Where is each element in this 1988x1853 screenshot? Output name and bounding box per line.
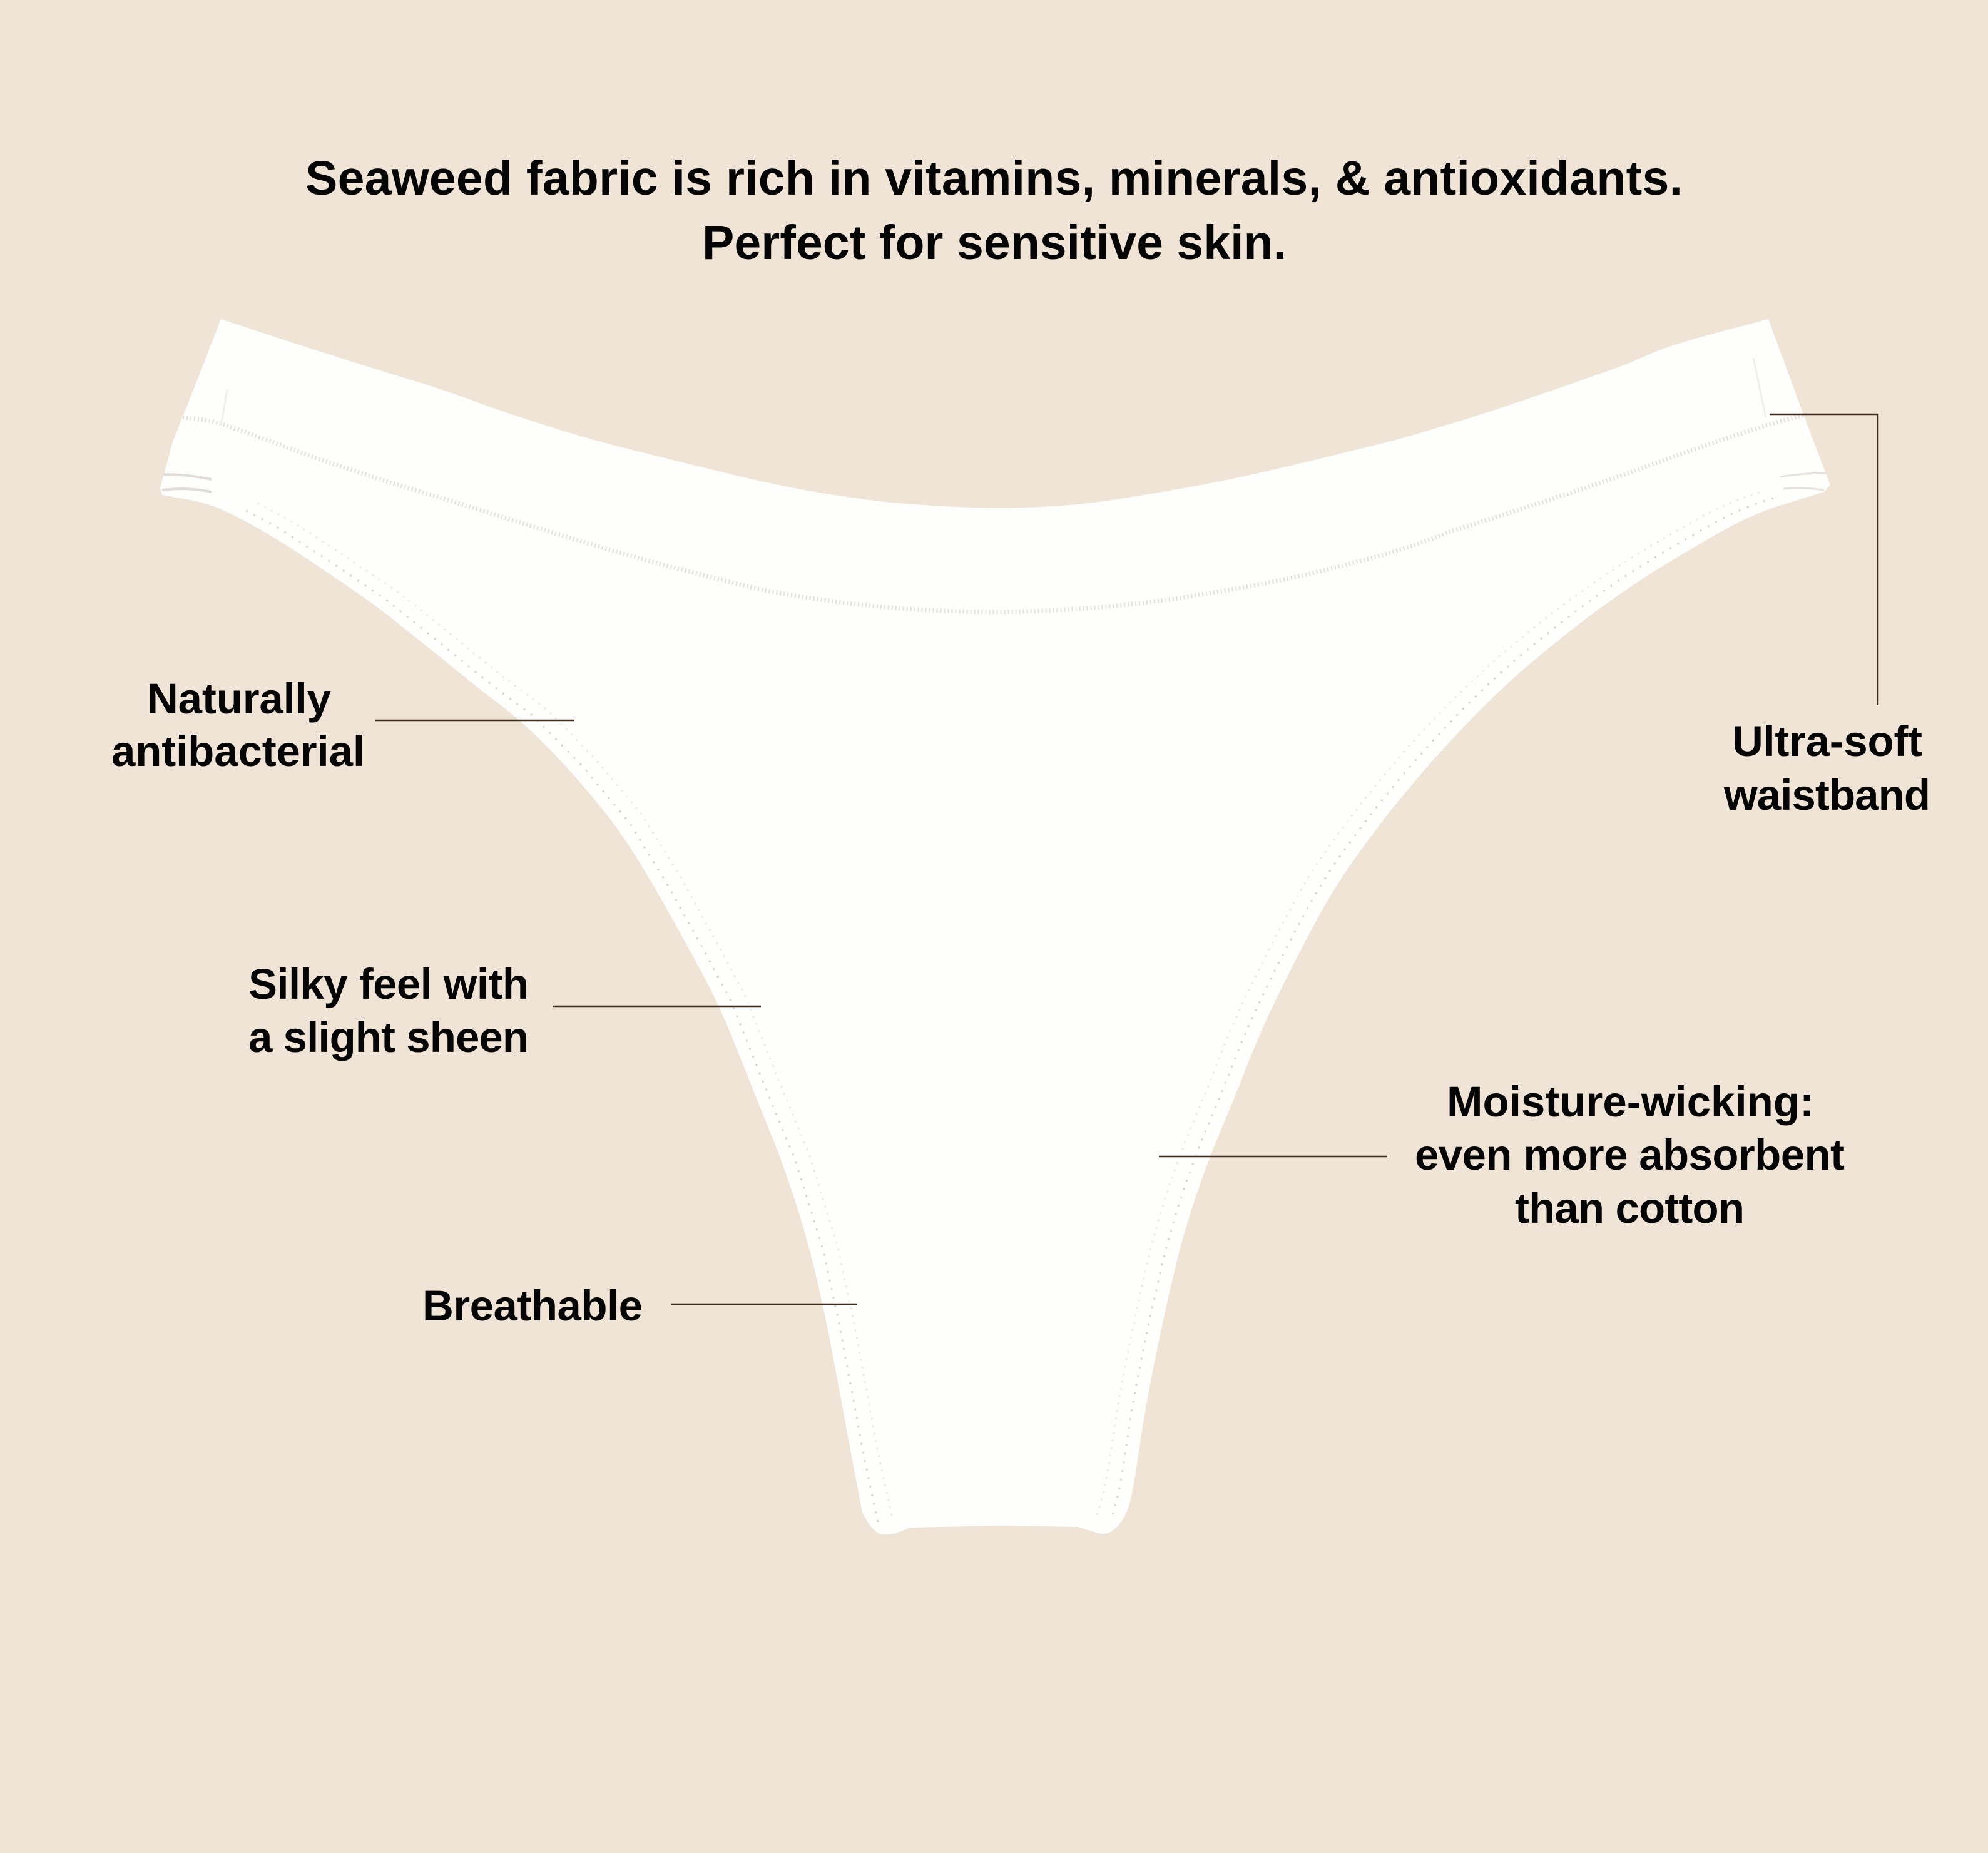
- label: naturally antibacterial: [111, 675, 365, 775]
- label: ultra-soft waistband: waistband: [1723, 771, 1930, 819]
- right side stitches: [1780, 473, 1827, 490]
- left leg outer stitching: [242, 508, 878, 1522]
- label: moisture-wicking: Moisture-wicking:: [1447, 1078, 1814, 1126]
- right leg inner stitching: [1097, 493, 1760, 1516]
- label: moisture-wicking: than cotton: [1515, 1184, 1745, 1232]
- title: Perfect for sensitive skin.: [702, 216, 1287, 270]
- leader line: breathable: [671, 1304, 857, 1305]
- label: breathable: Breathable: [422, 1282, 643, 1330]
- waistband seam: [183, 414, 1808, 612]
- leader line: naturally antibacterial: [375, 720, 574, 721]
- label: ultra-soft waistband: Ultra-soft: [1732, 717, 1922, 765]
- label: moisture-wicking: even more absorbent: [1415, 1131, 1845, 1179]
- right leg outer stitching: [1111, 498, 1773, 1521]
- label: naturally antibacterial: Naturally: [147, 675, 331, 723]
- title: Seaweed fabric is rich in vitamins, minerals, & antioxidants.: [305, 151, 1683, 205]
- label: moisture-wicking: [1415, 1078, 1845, 1232]
- waistband end seams: [221, 358, 1766, 426]
- garment body: [160, 319, 1830, 1534]
- label: silky feel: Silky feel with: [248, 960, 529, 1008]
- label: silky feel: [248, 960, 529, 1061]
- label: naturally antibacterial: antibacterial: [111, 727, 365, 775]
- garment illustration: white seaweed-fabric thong: [160, 319, 1830, 1534]
- leader line: silky feel: [553, 1006, 761, 1007]
- leader line: moisture-wicking: [1159, 1156, 1387, 1157]
- label: silky feel: a slight sheen: [248, 1013, 529, 1061]
- leader line: ultra-soft waistband: [1770, 414, 1878, 705]
- left leg inner stitching: [255, 502, 892, 1516]
- label: ultra-soft waistband: [1723, 717, 1930, 819]
- left side stitches: [162, 474, 212, 492]
- title: [305, 151, 1683, 270]
